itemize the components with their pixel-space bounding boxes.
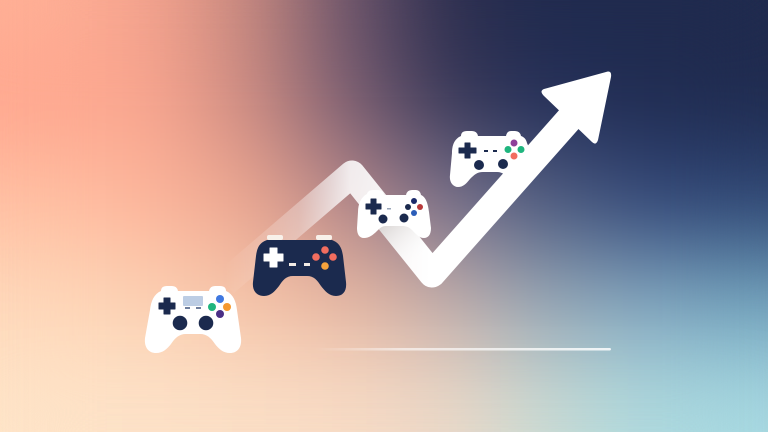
face buttons <box>312 246 337 270</box>
menu buttons <box>484 150 497 152</box>
thumbsticks <box>378 214 408 224</box>
d-pad <box>264 248 283 267</box>
small buttons <box>185 307 201 309</box>
center dot <box>387 208 391 210</box>
d-pad <box>159 298 175 314</box>
face buttons <box>208 295 231 318</box>
d-pad <box>366 199 381 214</box>
controller 3: white, middle <box>357 190 431 238</box>
rising arrow <box>225 72 611 283</box>
face buttons <box>504 140 524 160</box>
controller 2: navy <box>253 235 346 296</box>
screen <box>183 296 203 306</box>
arrow shaft <box>225 116 572 283</box>
d-pad <box>459 143 476 158</box>
controller 1: white, lower left <box>145 286 241 353</box>
thumbsticks <box>173 316 213 330</box>
baseline <box>315 348 611 350</box>
arrow shadow under controller <box>380 209 420 259</box>
menu buttons <box>289 263 310 266</box>
bumper highlights <box>267 235 332 240</box>
controller 4: white, upper <box>450 131 530 187</box>
arrow head <box>542 72 611 144</box>
thumbsticks <box>474 159 508 170</box>
face buttons <box>405 198 423 216</box>
